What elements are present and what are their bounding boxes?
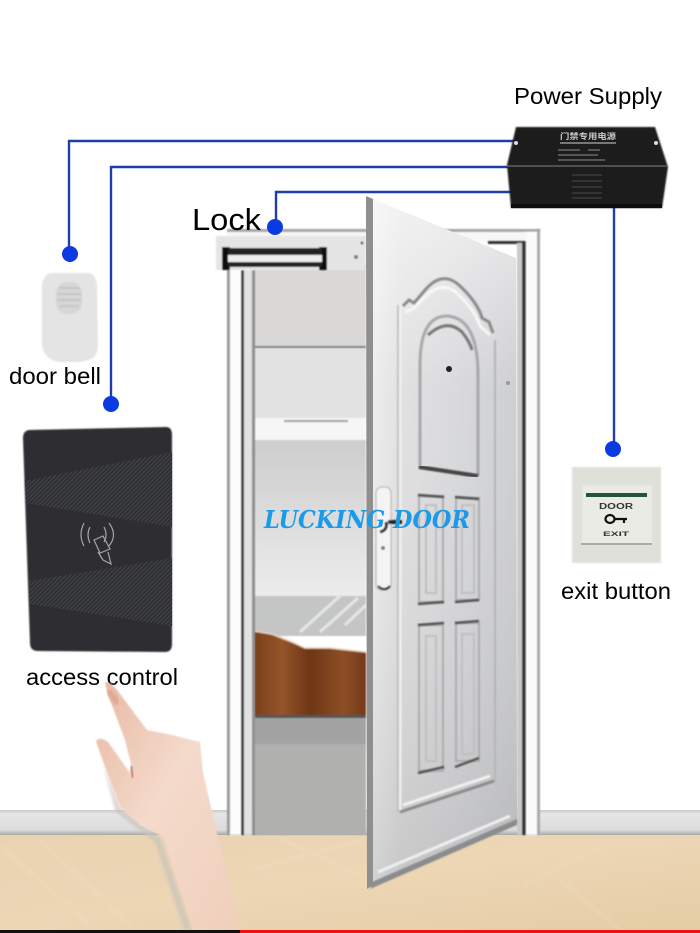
wires	[69, 141, 614, 447]
door frame right	[488, 229, 540, 835]
door frame top	[227, 229, 540, 242]
watermark: LUCKING DOOR	[263, 505, 470, 534]
arch panel bottom bar	[419, 467, 478, 476]
door bell	[42, 273, 98, 362]
label: exit button: exit button	[561, 578, 671, 604]
exit button	[572, 467, 661, 563]
door moulding	[398, 279, 495, 812]
power supply	[507, 127, 668, 208]
label: access control: access control	[26, 664, 178, 690]
lock plate and magnetic lock	[216, 236, 366, 270]
label: lock: Lock	[192, 202, 262, 237]
door leaf	[366, 196, 517, 889]
exit button: EXIT	[603, 531, 629, 538]
arched panel	[420, 316, 478, 476]
label: door bell: door bell	[9, 363, 101, 389]
door frame left	[227, 270, 255, 835]
doorway interior	[254, 262, 366, 835]
floor	[0, 835, 700, 930]
peephole	[446, 366, 452, 372]
connection dots	[62, 219, 621, 457]
bottom strip	[0, 930, 700, 933]
exit button: DOOR	[599, 502, 633, 511]
lower panels	[419, 496, 479, 771]
dark panel edges	[418, 495, 479, 773]
icon: RFID card symbol	[81, 523, 114, 564]
label: power supply: Power Supply	[514, 83, 663, 109]
door screw	[506, 381, 510, 385]
door handle	[376, 487, 402, 590]
baseboard	[0, 810, 700, 835]
access control card reader	[23, 427, 172, 652]
label on power supply: 门禁专用电源	[560, 131, 616, 141]
hand	[96, 682, 240, 930]
icon: key	[606, 515, 627, 523]
